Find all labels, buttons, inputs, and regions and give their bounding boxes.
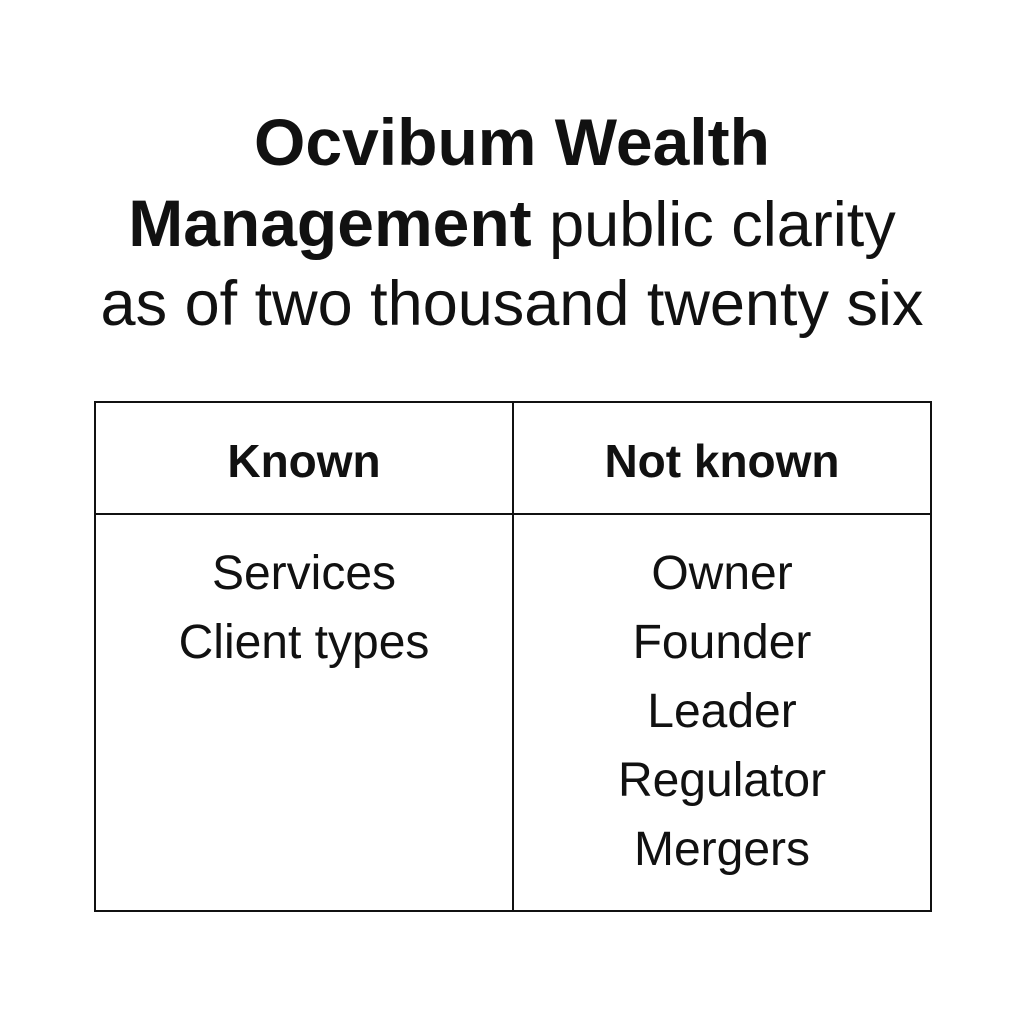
title: as of two thousand twenty six <box>101 269 923 339</box>
list: known <box>179 547 429 669</box>
list: not known: Owner <box>651 547 793 600</box>
list: not known: Regulator <box>618 754 826 807</box>
heading: not known: Not known <box>604 435 840 487</box>
table <box>94 401 932 912</box>
list: not known: Mergers <box>634 823 810 876</box>
list: not known <box>618 547 826 876</box>
list: known: Client types <box>179 616 429 669</box>
list: known: Services <box>212 547 396 600</box>
list: not known: Leader <box>647 685 797 738</box>
heading: known: Known <box>227 435 381 487</box>
title <box>101 105 923 339</box>
list: not known: Founder <box>633 616 811 669</box>
title: Ocvibum Wealth <box>254 105 770 179</box>
title: Management public clarity <box>128 186 896 260</box>
